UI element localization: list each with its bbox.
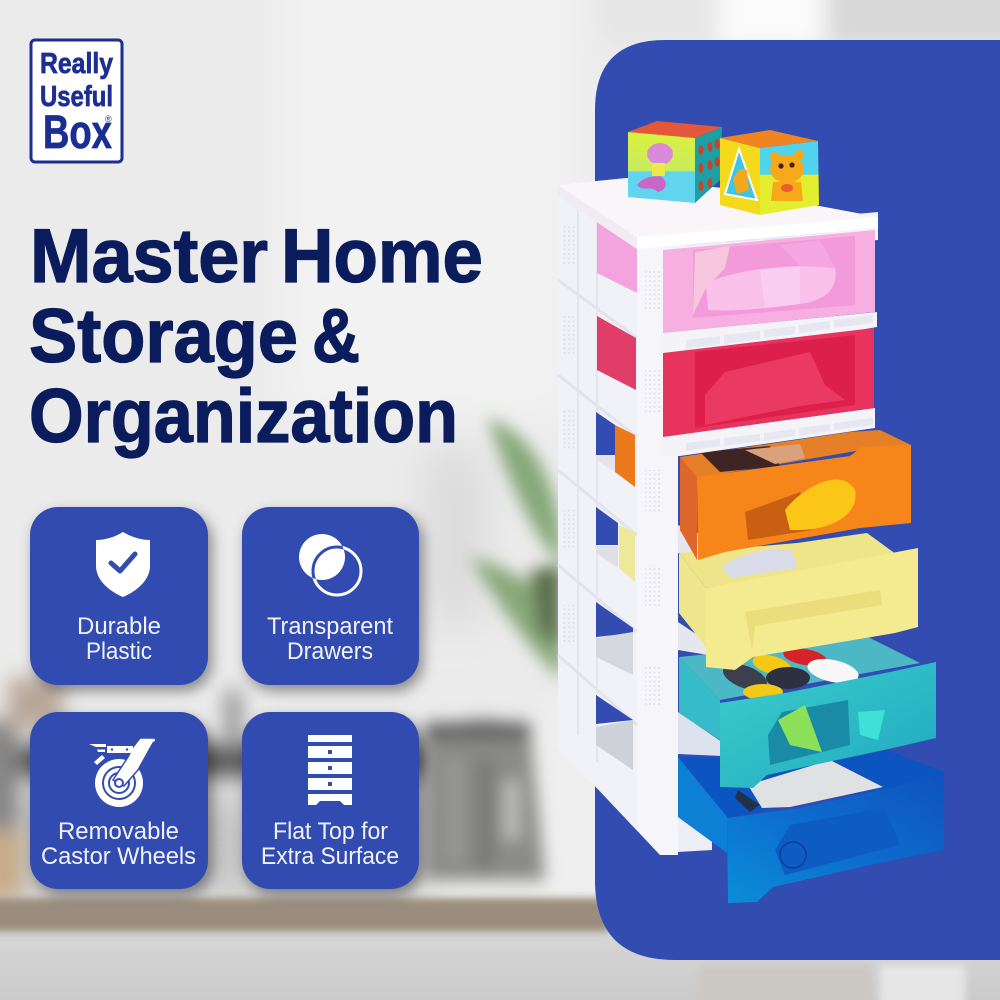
toy block: caterpillar <box>628 121 722 203</box>
rail segment windows <box>686 221 873 451</box>
icon: overlapping circles <box>299 534 361 595</box>
side windows <box>596 219 637 770</box>
icon: castor wheel <box>89 738 156 807</box>
frame: translucent white side and post <box>558 185 722 855</box>
icon: shield <box>96 532 150 597</box>
logo: Box <box>43 105 112 158</box>
card: durable plastic: Durable <box>77 613 161 640</box>
title: Organization <box>29 374 458 459</box>
card: durable plastic <box>30 507 208 685</box>
card: flat top: Extra Surface <box>261 843 399 870</box>
frame: top plate <box>558 178 878 249</box>
rails between closed drawers <box>660 212 878 456</box>
title: Master <box>30 214 268 299</box>
title <box>29 214 483 459</box>
drawer: blue <box>678 750 944 903</box>
card: flat top: Flat Top for <box>273 818 388 845</box>
card: removable castor wheels <box>30 712 208 889</box>
logo <box>31 40 122 162</box>
card: transparent drawers <box>242 507 419 685</box>
drawer: orange <box>680 430 911 560</box>
card: durable plastic: Plastic <box>86 638 152 665</box>
title: Home <box>281 214 483 299</box>
drawer: teal <box>679 637 936 788</box>
product: rainbow drawer tower <box>558 121 944 903</box>
toy block: bear <box>720 130 819 215</box>
drawer: red <box>663 328 874 437</box>
card: flat top <box>242 712 419 889</box>
logo: Really <box>40 48 113 80</box>
card: removable castor wheels: Removable <box>58 818 179 845</box>
logo: Useful <box>40 81 113 113</box>
card: transparent drawers: Transparent <box>267 613 393 640</box>
logo: ® <box>105 114 112 124</box>
card: transparent drawers: Drawers <box>287 638 373 665</box>
drawer: pink <box>663 230 875 333</box>
drawer: yellow <box>679 533 918 670</box>
title: Storage <box>29 294 298 379</box>
blue background panel <box>595 40 1000 960</box>
title: & <box>312 294 360 379</box>
icon: drawer unit <box>308 735 352 805</box>
card: removable castor wheels: Castor Wheels <box>41 843 196 870</box>
